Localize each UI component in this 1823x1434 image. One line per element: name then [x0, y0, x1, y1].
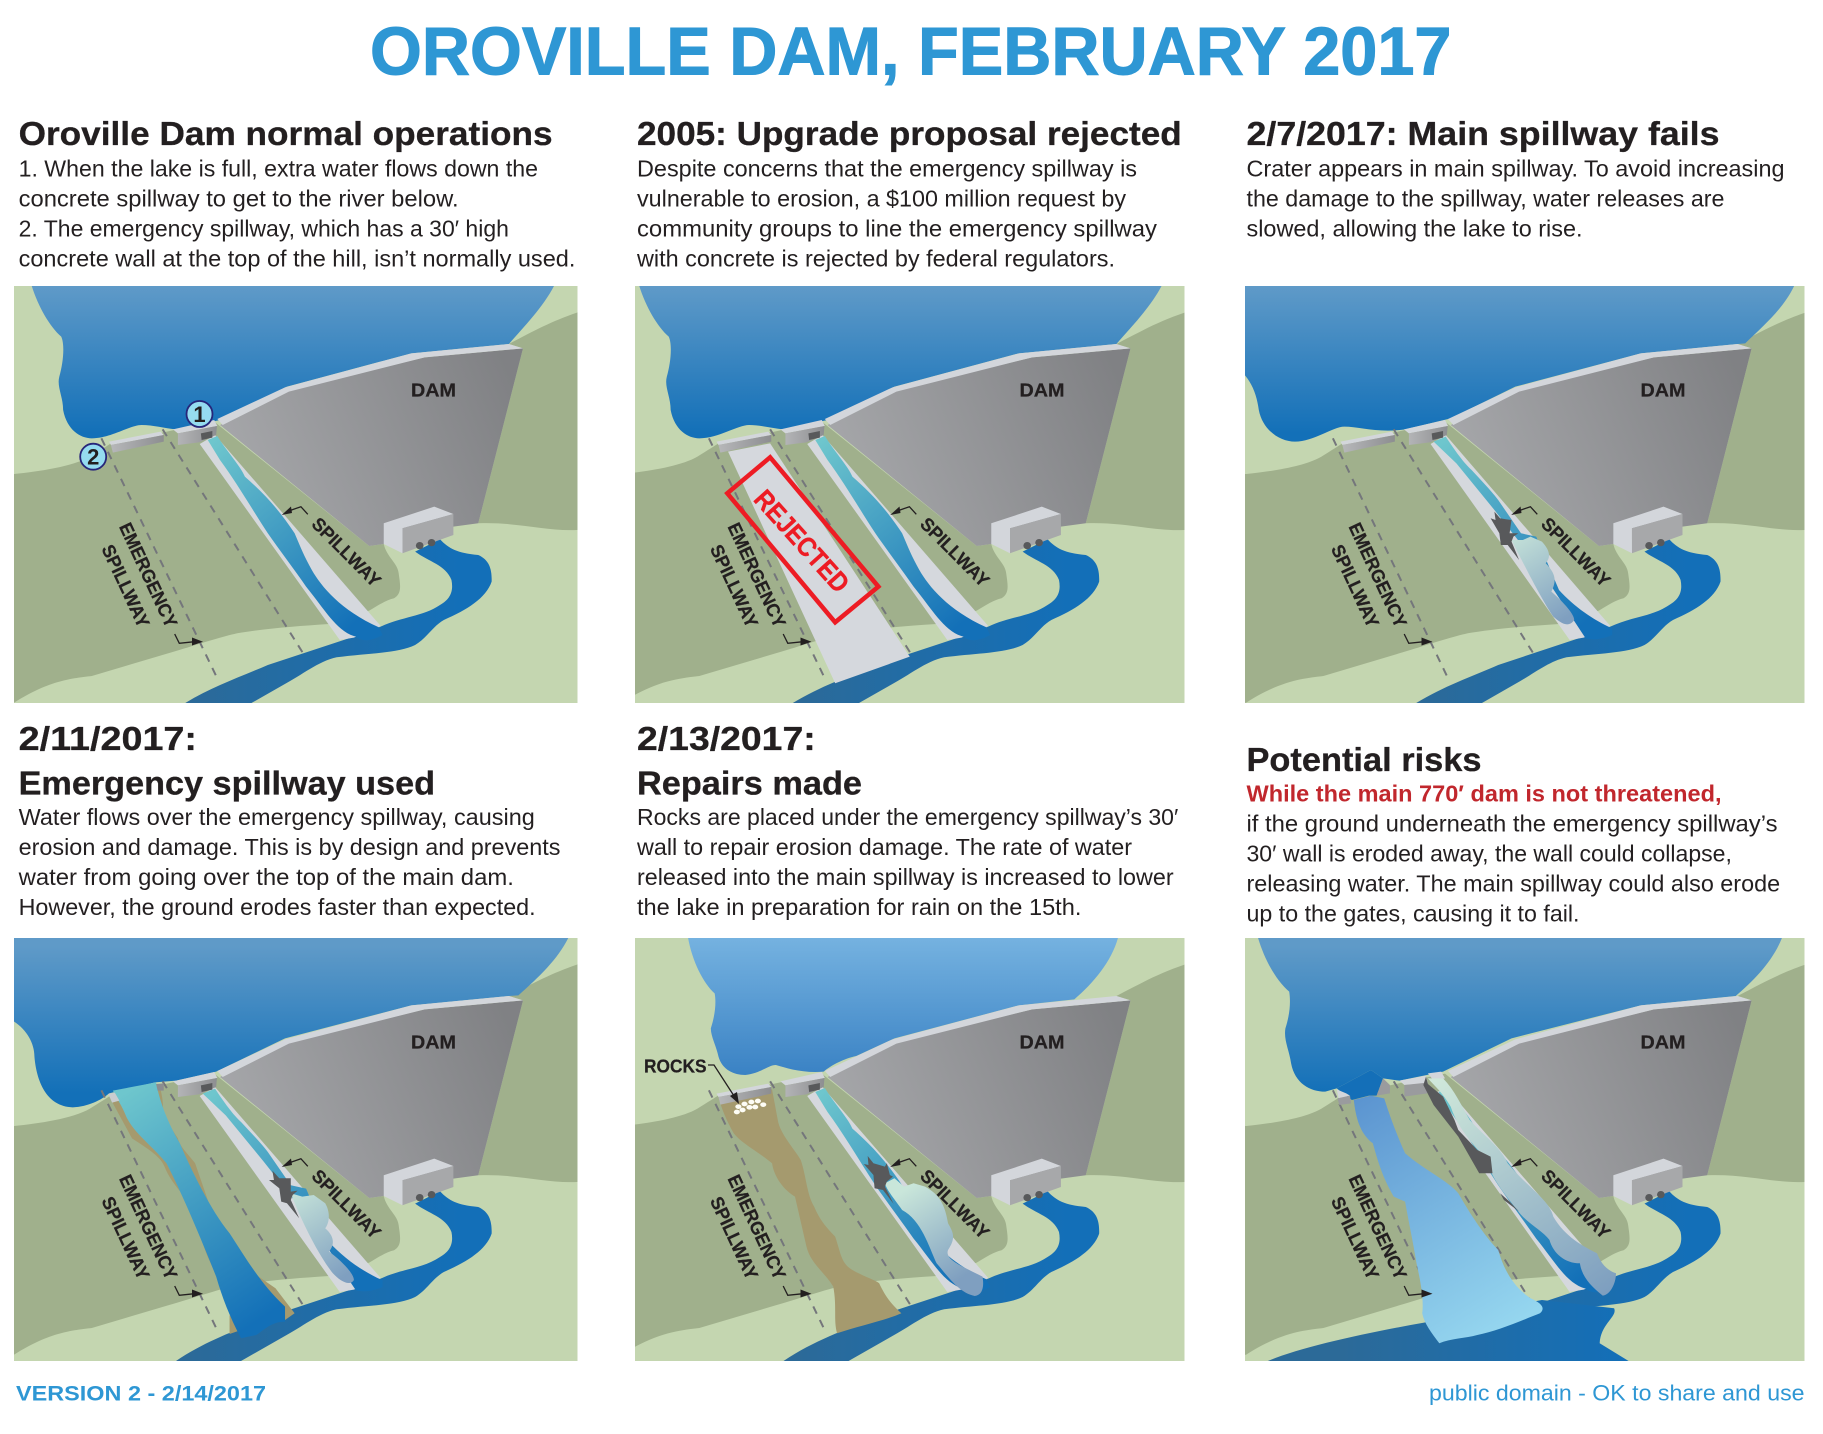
- callout 1: [186, 401, 212, 427]
- panel: 2005 text: community groups to line the emergency spillway: [637, 216, 1158, 242]
- panel: 2/13/2017 text: released into the main spillway is increased to lower: [637, 864, 1174, 890]
- labels: EMERGENCY: [115, 1171, 182, 1283]
- rejected stamp: [727, 457, 878, 622]
- panel: potential risks text: Potential risks: [1246, 742, 1482, 779]
- lake: [0, 937, 569, 1107]
- panel: 2/13/2017 text: Rocks are placed under the emergency spillway’s 30′: [637, 804, 1178, 830]
- labels: SPILLWAY: [97, 1193, 154, 1283]
- panel: potential risks text: if the ground underneath the emergency spillway’s: [1246, 811, 1778, 837]
- stamp text: REJECTED: [748, 484, 855, 599]
- flooded river pool: [1263, 1300, 1632, 1363]
- labels: [97, 1032, 456, 1298]
- panel: 2005 text: Despite concerns that the emergency spillway is: [637, 156, 1137, 182]
- labels: SPILLWAY: [916, 513, 994, 591]
- labels: SPILLWAY: [706, 541, 763, 631]
- flood: [1354, 1096, 1543, 1343]
- panel: normal operations text: concrete wall at the top of the hill, isn’t normally used.: [19, 246, 575, 272]
- labels: SPILLWAY: [97, 541, 154, 631]
- panel: 2/11/2017 text: [18, 721, 560, 920]
- erosion: [110, 1090, 295, 1334]
- labels: DAM: [411, 380, 456, 400]
- labels: DAM: [1640, 380, 1686, 400]
- callout 1: 1: [193, 402, 206, 427]
- panel: 2/11/2017 text: Water flows over the emergency spillway, causing: [19, 804, 535, 830]
- foam: [291, 1193, 354, 1283]
- labels: SPILLWAY: [1327, 541, 1384, 631]
- panel: 2/13/2017 text: 2/13/2017:: [637, 721, 816, 758]
- footer version: VERSION 2 - 2/14/2017: [16, 1382, 266, 1406]
- title: OROVILLE DAM, FEBRUARY 2017: [370, 14, 1452, 90]
- panel: 2/7/2017 text: Crater appears in main spillway. To avoid increasing: [1246, 156, 1784, 182]
- labels: EMERGENCY: [724, 519, 791, 631]
- panel: 2/11/2017 text: However, the ground erodes faster than expected.: [19, 894, 536, 920]
- labels: SPILLWAY: [1537, 1165, 1615, 1243]
- diagram: main spillway fails: [1245, 286, 1804, 703]
- wall remnants: [1337, 1089, 1350, 1098]
- panel: 2005 text: with concrete is rejected by federal regulators.: [636, 246, 1115, 272]
- panel: 2/7/2017 text: slowed, allowing the lake to rise.: [1246, 216, 1582, 242]
- lake lowered: [688, 937, 1118, 1075]
- crater: [864, 1156, 894, 1204]
- panel: 2/11/2017 text: 2/11/2017:: [19, 721, 197, 758]
- footer credit: public domain - OK to share and use: [1429, 1380, 1804, 1406]
- labels: DAM: [411, 1032, 456, 1052]
- labels: SPILLWAY: [706, 1193, 763, 1283]
- labels: SPILLWAY: [308, 1165, 386, 1243]
- panel: 2/13/2017 text: [636, 721, 1178, 920]
- wall stubs: [108, 1093, 119, 1103]
- panel: 2/13/2017 text: wall to repair erosion damage. The rate of water: [636, 834, 1132, 860]
- foam: [885, 1178, 983, 1296]
- labels: [1327, 1032, 1686, 1298]
- labels: SPILLWAY: [308, 513, 386, 591]
- panel: 2/7/2017 text: the damage to the spillway, water releases are: [1246, 186, 1724, 212]
- panel: 2/7/2017 text: 2/7/2017: Main spillway fails: [1246, 116, 1720, 153]
- foam: [1512, 537, 1574, 624]
- callout 2: 2: [87, 445, 99, 470]
- labels: [97, 380, 456, 646]
- diagram: upgrade rejected: [635, 286, 1184, 703]
- diagram: emergency spillway used: [14, 938, 578, 1361]
- panel: normal operations text: [19, 116, 575, 272]
- labels: DAM: [1640, 1032, 1686, 1052]
- labels: SPILLWAY: [1537, 513, 1615, 591]
- labels: DAM: [1020, 1032, 1064, 1052]
- crater: [269, 1171, 299, 1218]
- panel: 2/11/2017 text: erosion and damage. This is by design and prevents: [19, 834, 561, 860]
- rocks: [734, 1099, 766, 1114]
- rocks label: ROCKS: [644, 1056, 706, 1076]
- panel: 2005 text: vulnerable to erosion, a $100 million request by: [637, 186, 1127, 212]
- erosion scar: [719, 1089, 901, 1333]
- panel: normal operations text: concrete spillway to get to the river below.: [19, 186, 459, 212]
- rocks label: [644, 1056, 739, 1104]
- panel: potential risks text: While the main 770′ dam is not threatened,: [1246, 781, 1722, 807]
- panel: 2/13/2017 text: the lake in preparation for rain on the 15th.: [637, 894, 1081, 920]
- labels: DAM: [1020, 380, 1064, 400]
- panel: normal operations text: 1. When the lake is full, extra water flows down the: [19, 156, 538, 182]
- labels: [1327, 380, 1686, 646]
- panel: normal operations text: 2. The emergency spillway, which has a 30′ high: [19, 216, 509, 242]
- labels: EMERGENCY: [1345, 1171, 1412, 1283]
- lake: [1258, 937, 1782, 1092]
- gate broken: [1399, 1076, 1428, 1085]
- panel: potential risks text: 30′ wall is eroded away, the wall could collapse,: [1246, 841, 1732, 867]
- labels: [706, 380, 1064, 646]
- panel: 2/13/2017 text: Repairs made: [637, 765, 862, 802]
- concrete lining proposal: [728, 443, 910, 683]
- labels: SPILLWAY: [916, 1165, 994, 1243]
- panel: 2/11/2017 text: water from going over the top of the main dam.: [18, 864, 514, 890]
- flood water: [113, 1082, 285, 1338]
- labels: [706, 1032, 1064, 1298]
- lake risen: [1226, 283, 1795, 442]
- foam: [1428, 1078, 1616, 1296]
- labels: EMERGENCY: [115, 519, 182, 631]
- diagram: repairs made: [635, 938, 1184, 1361]
- diagram: normal operations: [14, 286, 578, 703]
- diagram: potential risks: [1245, 938, 1804, 1361]
- panel: 2005 text: 2005: Upgrade proposal rejected: [637, 116, 1182, 153]
- panel: 2/11/2017 text: Emergency spillway used: [19, 765, 435, 802]
- panel: potential risks text: [1246, 742, 1780, 927]
- erosion dark: [1423, 1077, 1492, 1173]
- panel: potential risks text: up to the gates, causing it to fail.: [1246, 901, 1580, 927]
- breach channel: [1337, 1070, 1383, 1100]
- panel: normal operations text: Oroville Dam normal operations: [19, 116, 553, 153]
- crater: [1491, 512, 1519, 560]
- panel: potential risks text: releasing water. The main spillway could also erode: [1246, 871, 1780, 897]
- labels: EMERGENCY: [1345, 519, 1412, 631]
- panel: 2/7/2017 text: [1246, 116, 1784, 242]
- labels: EMERGENCY: [724, 1171, 791, 1283]
- panel: 2005 text: [636, 116, 1182, 272]
- labels: SPILLWAY: [1327, 1193, 1384, 1283]
- callout 2: [80, 444, 106, 470]
